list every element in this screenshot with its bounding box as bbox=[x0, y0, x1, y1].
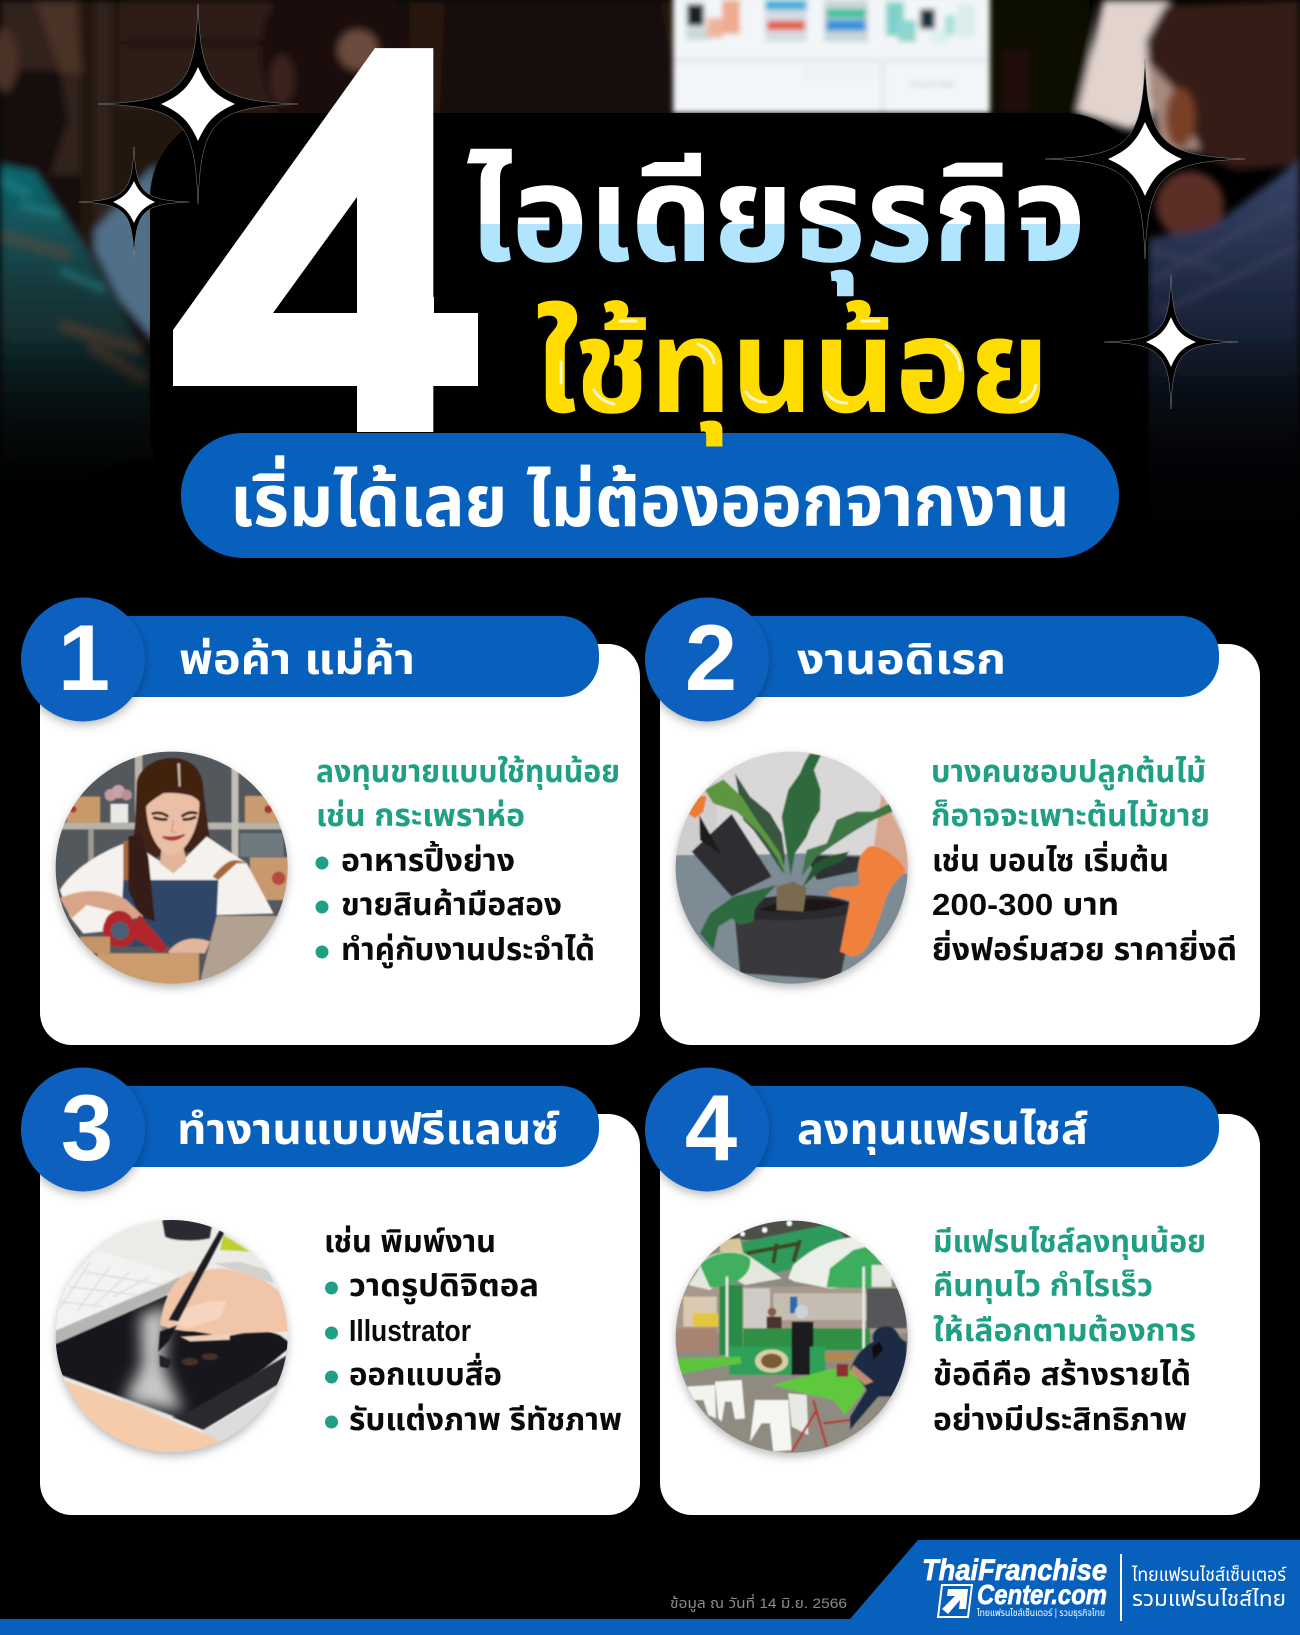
logo: ThaiFranchise Center.com: ThaiFranchise bbox=[922, 1554, 1107, 1587]
photo: woman packing box bbox=[50, 751, 292, 992]
photo: franchise food stall bbox=[670, 1220, 912, 1462]
presentation screen bbox=[673, 0, 990, 113]
header bar 1: 1 bbox=[58, 605, 110, 710]
brand tagline bbox=[1131, 1565, 1287, 1611]
black title panel bbox=[150, 113, 1148, 513]
big number 4 bbox=[173, 48, 478, 432]
text block 3: ออกแบบสื่อ bbox=[349, 1352, 502, 1392]
photo: drawing tablet bbox=[50, 1219, 292, 1461]
text block 4: ให้เลือกตามต้องการ bbox=[933, 1313, 1196, 1348]
brand tagline: ไทยแฟรนไชส์เซ็นเตอร์ bbox=[1131, 1565, 1287, 1586]
header bar 4 bbox=[645, 1068, 1219, 1192]
title line: ไอเดียธุรกิจ: ไอเดียธุรกิจ bbox=[467, 139, 1086, 296]
text block 2: 200-300 บาท bbox=[932, 887, 1119, 922]
header bar 4: 4 bbox=[685, 1075, 737, 1180]
text block 2: เช่น บอนไซ เริ่มต้น bbox=[932, 840, 1169, 878]
header bar 2 bbox=[645, 598, 1219, 722]
text block 1: อาหารปิ้งย่าง bbox=[341, 840, 515, 878]
text block 3: Illustrator bbox=[349, 1313, 471, 1348]
panel 3: ทำงานแบบฟรีแลนซ์ bbox=[21, 1068, 640, 1515]
text block 3: วาดรูปดิจิตอล bbox=[349, 1268, 539, 1304]
text block 3: รับแต่งภาพ รีทัชภาพ bbox=[349, 1402, 622, 1437]
header bar 1: พ่อค้า แม่ค้า bbox=[179, 636, 415, 684]
presentation screen: Control Tabs bbox=[910, 80, 955, 89]
header bar 4: ลงทุนแฟรนไชส์ bbox=[797, 1106, 1088, 1155]
text block 2: ก็อาจจะเพาะต้นไม้ขาย bbox=[931, 798, 1210, 833]
icon: arrow box bbox=[938, 1585, 972, 1617]
photo: potted plant bbox=[670, 751, 912, 992]
text block 1: เช่น กระเพราห่อ bbox=[316, 798, 525, 833]
star sparkle 2 bbox=[79, 147, 189, 257]
logo: ThaiFranchise Center.com: Center.com bbox=[977, 1579, 1107, 1610]
header bar 3: 3 bbox=[61, 1075, 113, 1180]
header bar 3 bbox=[21, 1068, 599, 1192]
header bar 2: งานอดิเรก bbox=[797, 636, 1006, 684]
text block 1: ทำคู่กับงานประจำได้ bbox=[341, 932, 595, 968]
panel 4: ลงทุนแฟรนไชส์ bbox=[645, 1068, 1260, 1515]
panel 1: พ่อค้า แม่ค้า bbox=[21, 598, 640, 1045]
text block 3 bbox=[324, 1224, 622, 1437]
text block 4: อย่างมีประสิทธิภาพ bbox=[933, 1402, 1187, 1437]
text block 1: ขายสินค้ามือสอง bbox=[341, 887, 562, 922]
text block 4 bbox=[933, 1224, 1206, 1437]
text block 1 bbox=[316, 754, 620, 968]
text block 2: ยิ่งฟอร์มสวย ราคายิ่งดี bbox=[932, 929, 1237, 967]
star sparkle 1 bbox=[98, 4, 298, 204]
title line: ใช้ทุนน้อย: ใช้ทุนน้อย bbox=[535, 293, 1049, 446]
footer bar bbox=[0, 1540, 1300, 1635]
text block 4: มีแฟรนไชส์ลงทุนน้อย bbox=[933, 1224, 1206, 1260]
text block 4: ข้อดีคือ สร้างรายได้ bbox=[933, 1357, 1191, 1392]
panel 2: งานอดิเรก bbox=[645, 598, 1260, 1045]
glossy highlights bbox=[561, 321, 1036, 404]
brand tagline: รวมแฟรนไชส์ไทย bbox=[1132, 1588, 1286, 1611]
logo: ThaiFranchise Center.com: ไทยแฟรนไชส์เซ็นเตอร์ | รวมธุรกิจไทย bbox=[976, 1606, 1105, 1619]
text block 1: ลงทุนขายแบบใช้ทุนน้อย bbox=[316, 754, 620, 790]
logo: ThaiFranchise Center.com bbox=[922, 1554, 1107, 1619]
star sparkle 4 bbox=[1104, 275, 1238, 409]
source date: ข้อมูล ณ วันที่ 14 มิ.ย. 2566 bbox=[670, 1593, 847, 1612]
header bar 3: ทำงานแบบฟรีแลนซ์ bbox=[177, 1106, 560, 1154]
star sparkle 3 bbox=[1045, 59, 1245, 259]
header bar 1 bbox=[21, 598, 599, 722]
text block 2: บางคนชอบปลูกต้นไม้ bbox=[931, 754, 1206, 790]
header bar 2: 2 bbox=[685, 605, 737, 710]
text block 4: คืนทุนไว กำไรเร็ว bbox=[933, 1268, 1153, 1304]
pill text: เริ่มได้เลย ไม่ต้องออกจากงาน bbox=[230, 455, 1070, 542]
subtitle pill bbox=[181, 433, 1119, 558]
text block 3: เช่น พิมพ์งาน bbox=[324, 1224, 496, 1259]
text block 2 bbox=[931, 754, 1237, 967]
